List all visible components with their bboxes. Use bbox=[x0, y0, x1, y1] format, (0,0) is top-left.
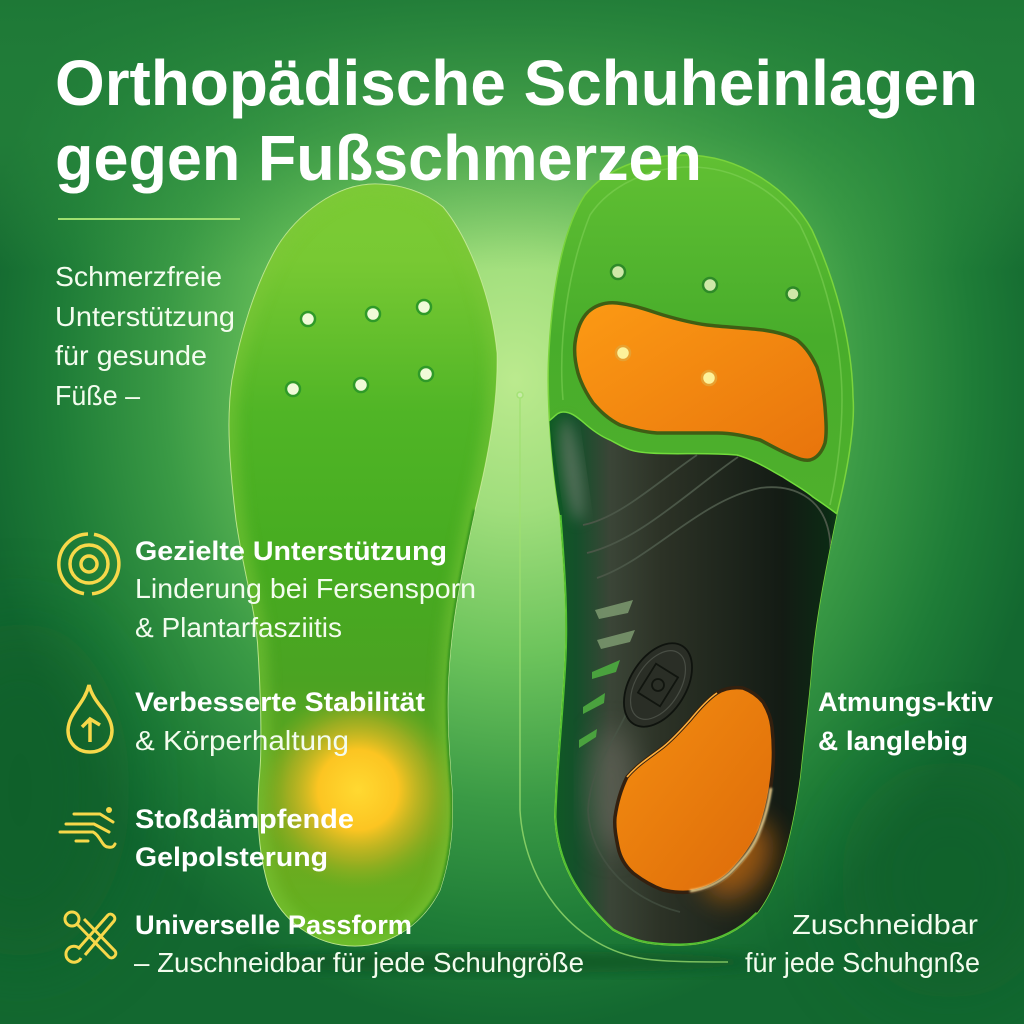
callout: breathable: & langlebig bbox=[818, 726, 968, 756]
rim stroke bbox=[555, 515, 757, 945]
feature 1: Gezielte Unterstützung bbox=[135, 536, 447, 566]
title bbox=[55, 47, 978, 194]
callout: trimmable: Zuschneidbar bbox=[792, 909, 978, 940]
feature 4: Universelle Passform bbox=[135, 910, 412, 940]
feature 1: Linderung bei Fersensporn bbox=[135, 573, 476, 604]
holes bbox=[611, 265, 800, 300]
shell inner lip bbox=[562, 167, 842, 505]
title: Orthopädische Schuheinlagen bbox=[55, 47, 978, 119]
heel glow bbox=[688, 807, 788, 913]
callout: trimmable: für jede Schuhgnße bbox=[745, 947, 980, 978]
heel orange pad bbox=[615, 688, 774, 892]
arch ridges bbox=[595, 600, 635, 649]
feature 3: Gelpolsterung bbox=[135, 842, 328, 872]
icon: shock lines bbox=[60, 807, 115, 847]
heel grey area bbox=[588, 728, 636, 852]
title divider bbox=[58, 218, 240, 220]
logo emboss bbox=[610, 631, 706, 739]
icon: drop with arrow bbox=[68, 685, 112, 752]
feature 2 bbox=[68, 685, 425, 756]
dark arch shell bbox=[545, 412, 845, 960]
forefoot orange pad bbox=[575, 303, 826, 460]
callout: breathable bbox=[818, 687, 993, 756]
left insole bbox=[229, 184, 497, 946]
feature 4: – Zuschneidbar für jede Schuhgröße bbox=[134, 947, 584, 978]
icon: scissors bbox=[65, 912, 116, 962]
callout: trimmable bbox=[745, 909, 980, 978]
feature 4 bbox=[65, 910, 584, 978]
subtitle: Füße – bbox=[55, 380, 140, 411]
icon: target bbox=[59, 534, 119, 594]
heel highlight bbox=[690, 788, 771, 891]
feature 1: & Plantarfasziitis bbox=[135, 612, 342, 643]
feature 3 bbox=[60, 804, 354, 872]
title: gegen Fußschmerzen bbox=[55, 122, 702, 194]
feature 2: & Körperhaltung bbox=[135, 725, 349, 756]
arch highlight bbox=[556, 417, 588, 523]
right insole bbox=[545, 155, 853, 960]
ventilation holes bbox=[286, 300, 433, 396]
heel glow bbox=[266, 696, 449, 882]
arch contours bbox=[583, 455, 831, 912]
subtitle: Unterstützung bbox=[55, 301, 235, 332]
feature 3: Stoßdämpfende bbox=[135, 804, 354, 834]
callout leader line bbox=[517, 392, 728, 962]
green shell bbox=[548, 155, 853, 945]
feature 2: Verbesserte Stabilität bbox=[135, 687, 425, 717]
subtitle bbox=[55, 261, 235, 411]
feature 1 bbox=[59, 534, 476, 643]
callout: breathable: Atmungs-ktiv bbox=[818, 687, 993, 717]
subtitle: für gesunde bbox=[55, 340, 207, 371]
subtitle: Schmerzfreie bbox=[55, 261, 222, 292]
